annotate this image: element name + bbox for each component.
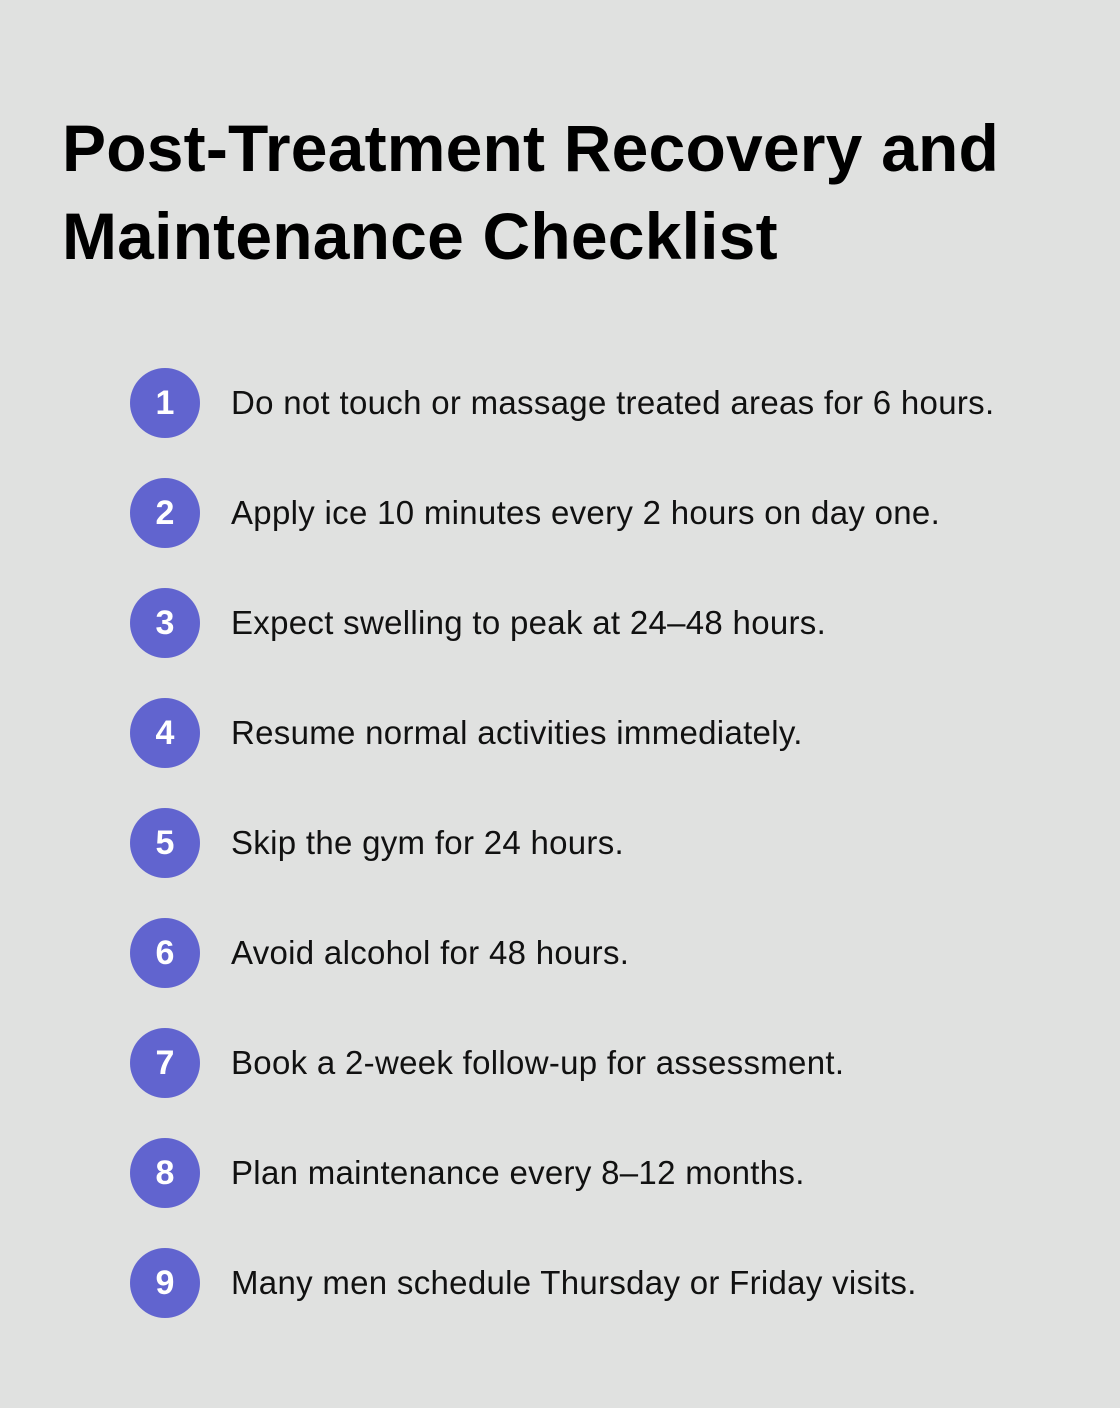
item 2: 2 bbox=[156, 494, 174, 532]
item 5: 5 bbox=[156, 824, 174, 862]
item 4: Resume normal activities immediately. bbox=[231, 714, 803, 751]
item 8 bbox=[130, 1138, 805, 1208]
item 7: Book a 2-week follow-up for assessment. bbox=[231, 1044, 844, 1081]
item 7 bbox=[130, 1028, 844, 1098]
item 1: 1 bbox=[156, 384, 174, 422]
item 9: Many men schedule Thursday or Friday visits. bbox=[231, 1264, 917, 1301]
item 3: Expect swelling to peak at 24–48 hours. bbox=[231, 604, 826, 641]
item 5: Skip the gym for 24 hours. bbox=[231, 824, 624, 861]
title: Post-Treatment Recovery and bbox=[62, 111, 999, 185]
item 2: Apply ice 10 minutes every 2 hours on day one. bbox=[231, 494, 940, 531]
item 9 bbox=[130, 1248, 917, 1318]
item 6: 6 bbox=[156, 934, 174, 972]
item 5 bbox=[130, 808, 624, 878]
item 6 bbox=[130, 918, 629, 988]
item 3: 3 bbox=[156, 604, 174, 642]
item 4 bbox=[130, 698, 803, 768]
item 7: 7 bbox=[156, 1044, 174, 1082]
item 8: Plan maintenance every 8–12 months. bbox=[231, 1154, 805, 1191]
item 6: Avoid alcohol for 48 hours. bbox=[231, 934, 629, 971]
title bbox=[62, 111, 999, 273]
item 4: 4 bbox=[156, 714, 174, 752]
item 9: 9 bbox=[156, 1264, 174, 1302]
item 1: Do not touch or massage treated areas for 6 hours. bbox=[231, 384, 994, 421]
title: Maintenance Checklist bbox=[62, 199, 778, 273]
item 3 bbox=[130, 588, 826, 658]
item 2 bbox=[130, 478, 940, 548]
item 1 bbox=[130, 368, 994, 438]
item 8: 8 bbox=[156, 1154, 174, 1192]
